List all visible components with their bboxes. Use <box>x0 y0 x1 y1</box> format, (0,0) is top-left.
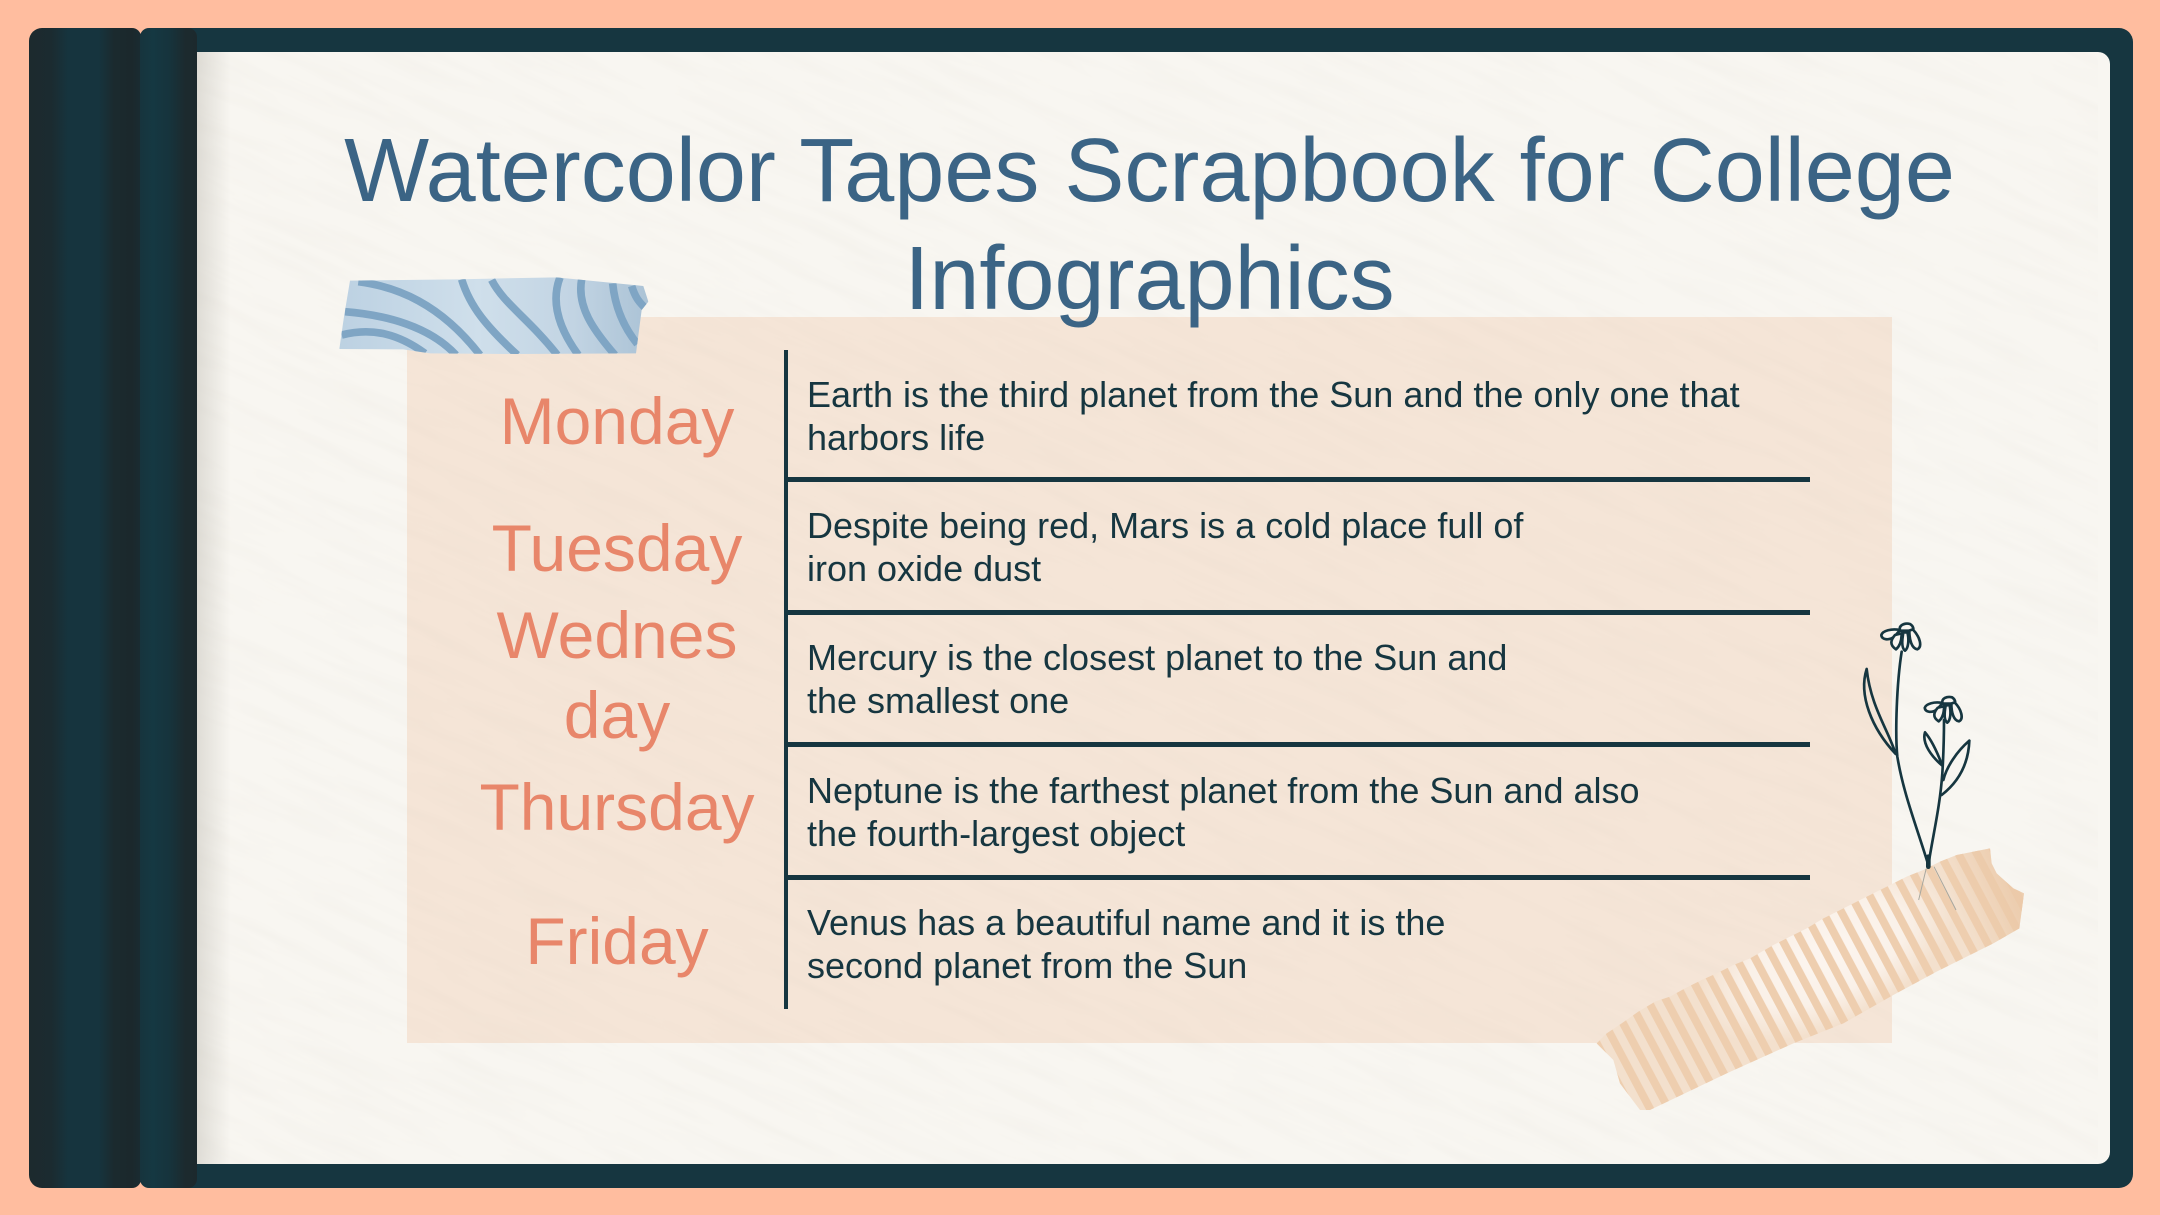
leaf: right <box>1942 741 1969 795</box>
leaf: left <box>1864 669 1896 754</box>
panel: schedule background <box>407 317 1892 1043</box>
text: Mercury: the smallest one <box>807 680 1069 721</box>
text: Mercury <box>807 637 1507 721</box>
text: Earth: harbors life <box>807 417 985 458</box>
label: Wednesday: Wednes <box>497 598 737 672</box>
label: Thursday: Thursday <box>479 770 755 844</box>
label: Friday: Friday <box>525 904 709 978</box>
tape and flower decoration <box>1596 622 2024 1110</box>
tape: blue watercolor <box>340 277 648 354</box>
text: Earth <box>807 374 1740 458</box>
text: Venus <box>807 902 1445 986</box>
icon: flowers <box>1864 624 1969 867</box>
stem knot <box>1921 857 1935 867</box>
day labels <box>479 384 755 978</box>
label: Monday: Monday <box>500 384 734 458</box>
table divider lines <box>784 350 1810 1009</box>
flower head: tall <box>1881 624 1920 651</box>
label: Tuesday: Tuesday <box>492 511 742 585</box>
text: Mars: Despite being red, Mars is a cold place full of <box>807 505 1523 546</box>
label: Wednesday: day <box>564 678 670 752</box>
spine: outer fold <box>29 28 141 1188</box>
stem: tall flower <box>1896 652 1928 865</box>
text: Mars <box>807 505 1524 589</box>
text: Neptune: the fourth-largest object <box>807 813 1185 854</box>
text: Mars: iron oxide dust <box>807 548 1041 589</box>
title <box>344 121 1955 329</box>
text: Earth: Earth is the third planet from the Sun and the only one that <box>807 374 1740 415</box>
tape: peach striped <box>1593 843 2027 1113</box>
label: Wednesday <box>496 598 737 752</box>
title: Watercolor Tapes Scrapbook for College <box>344 121 1955 221</box>
text: Venus: Venus has a beautiful name and it is the <box>807 902 1445 943</box>
stem: short flower <box>1928 720 1944 865</box>
text: Mercury: Mercury is the closest planet to the Sun and <box>807 637 1507 678</box>
title: Infographics <box>904 229 1395 329</box>
text: Neptune: Neptune is the farthest planet from the Sun and also <box>807 770 1640 811</box>
leaf: small left <box>1924 732 1942 766</box>
flower head: short <box>1925 697 1962 723</box>
descriptions <box>807 374 1740 986</box>
text: Venus: second planet from the Sun <box>807 945 1247 986</box>
spine: inner fold <box>140 28 197 1188</box>
text: Neptune <box>807 770 1640 854</box>
